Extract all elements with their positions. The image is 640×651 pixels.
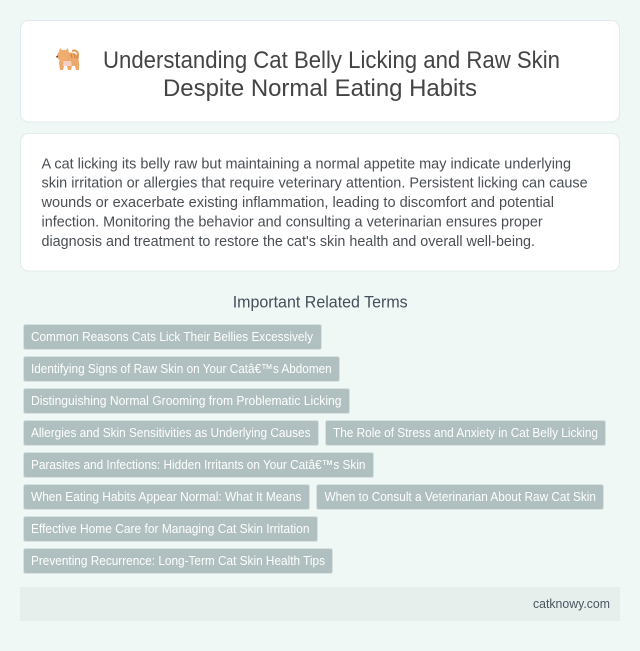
title: Understanding Cat Belly Licking and Raw Skin — [103, 47, 560, 74]
tag: Common Reasons Cats Lick Their Bellies Excessively — [31, 329, 314, 344]
text block: summary — [41, 156, 588, 250]
text block: summary: A cat licking its belly raw but maintaining a normal appetite may indicate underlying — [42, 156, 571, 172]
tag: Distinguishing Normal Grooming from Problematic Licking — [31, 393, 342, 408]
icon: cat — [56, 48, 79, 70]
text block: summary: skin irritation or allergies that require veterinary attention. Persistent licking can cause — [42, 176, 588, 192]
footer — [20, 587, 620, 621]
tag list — [24, 324, 606, 574]
tag: Preventing Recurrence: Long-Term Cat Skin Health Tips — [31, 553, 325, 568]
tag: The Role of Stress and Anxiety in Cat Belly Licking — [333, 425, 598, 440]
heading: related terms: Important Related Terms — [233, 294, 408, 312]
panel: intro text — [20, 134, 620, 271]
tag: Effective Home Care for Managing Cat Skin Irritation — [31, 521, 310, 536]
tag — [316, 484, 604, 510]
tag — [24, 324, 322, 350]
tag: Allergies and Skin Sensitivities as Underlying Causes — [31, 425, 310, 440]
text block: summary: wounds or exacerbate existing inflammation, leading to discomfort and potential — [41, 195, 554, 211]
tag — [24, 420, 318, 446]
tag: When to Consult a Veterinarian About Raw Cat Skin — [324, 489, 596, 504]
tag — [24, 452, 374, 478]
tag — [24, 388, 350, 414]
tag — [24, 548, 332, 574]
title — [103, 47, 560, 102]
tag: Identifying Signs of Raw Skin on Your Catâ€™s Abdomen — [31, 361, 332, 376]
tag — [24, 356, 340, 382]
footer text: catknowy.com — [533, 597, 610, 611]
text block: summary: diagnosis and treatment to restore the cat's skin health and overall well-being. — [42, 234, 535, 250]
tag — [24, 484, 310, 510]
panel: title card — [20, 20, 620, 122]
tag — [326, 420, 606, 446]
title: Despite Normal Eating Habits — [163, 75, 477, 102]
tag: Parasites and Infections: Hidden Irritants on Your Catâ€™s Skin — [31, 457, 366, 472]
text block: summary: infection. Monitoring the behavior and consulting a veterinarian ensures proper — [42, 215, 543, 231]
tag: When Eating Habits Appear Normal: What It Means — [31, 489, 302, 504]
tag — [24, 516, 318, 542]
